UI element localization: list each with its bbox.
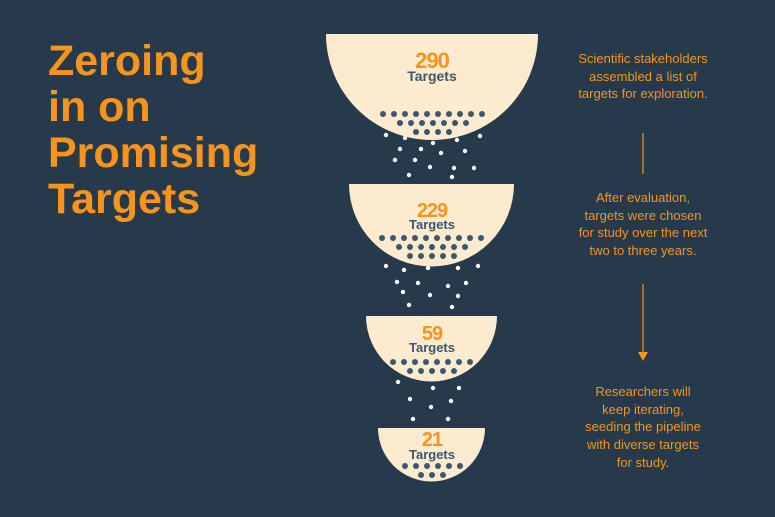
text: step 1: Scientific stakeholders [578, 51, 708, 66]
text: step 3: for study. [617, 455, 669, 470]
text: step 1: assembled a list of [589, 69, 697, 84]
text: step 2: for study over the next [579, 225, 707, 240]
title: Promising [48, 129, 258, 177]
title: Targets [48, 175, 200, 223]
text: step 3: with diverse targets [587, 437, 699, 452]
text: step 2: targets were chosen [584, 208, 702, 223]
text: step 3 [585, 384, 701, 470]
text: step 1 [578, 51, 708, 101]
bowl: 21: 21 [422, 429, 443, 451]
falling dots 1 [384, 133, 482, 179]
text: step 2 [578, 190, 708, 258]
arrow: connector 1 [642, 133, 644, 174]
bowl: 290: Targets [407, 68, 457, 84]
arrow: connector 2 [638, 284, 648, 361]
bowl: 229: Targets [409, 217, 455, 232]
text: step 2: After evaluation, [596, 190, 690, 205]
bowl: 59: Targets [409, 340, 455, 355]
title [48, 37, 258, 223]
title: in on [48, 83, 151, 131]
bowl: 21: Targets [409, 447, 455, 462]
bowl: 229 [349, 184, 514, 266]
falling dots 2 [384, 264, 480, 309]
bowl: 229: 229 [417, 200, 448, 222]
bowl: 21 [378, 428, 485, 482]
bowl: 59: 59 [422, 323, 443, 345]
title: Zeroing [48, 37, 206, 85]
text: step 3: keep iterating, [602, 402, 684, 417]
text: step 3: Researchers will [595, 384, 691, 399]
text: step 3: seeding the pipeline [585, 419, 701, 434]
bowl: 290: 290 [415, 48, 450, 73]
text: step 2: two to three years. [590, 243, 696, 258]
falling dots 3 [396, 380, 461, 421]
bowl: 59 [366, 316, 497, 382]
text: step 1: targets for exploration. [578, 86, 708, 101]
bowl: 290 [326, 34, 538, 140]
